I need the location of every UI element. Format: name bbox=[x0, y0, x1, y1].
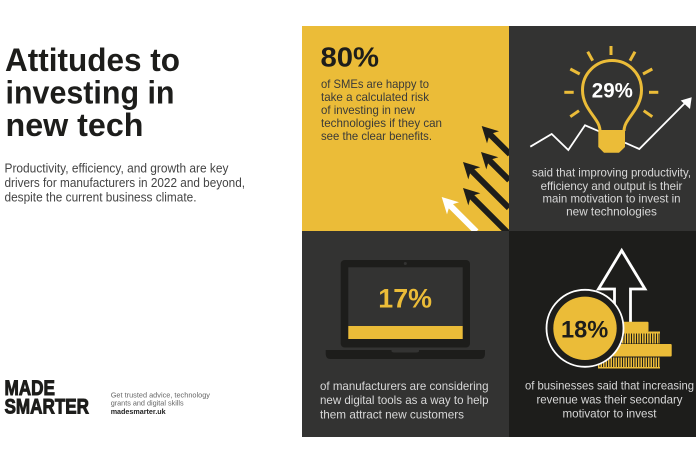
text: 17% description: them attract new customers bbox=[320, 407, 464, 421]
panel: 17% manufacturers bbox=[302, 231, 509, 437]
panel: 29% productivity bbox=[509, 26, 696, 231]
icon: laptop bbox=[326, 260, 485, 359]
text: 17% description: new digital tools as a way to help bbox=[320, 393, 489, 407]
title bbox=[5, 42, 180, 143]
text: 29% description: main motivation to invest in bbox=[542, 192, 680, 206]
text: 29% description: new technologies bbox=[566, 204, 657, 218]
stat: 18%: 18% bbox=[561, 317, 608, 344]
text: 29% description: said that improving productivity, bbox=[532, 166, 691, 180]
logo strapline: madesmarter.uk bbox=[111, 407, 166, 416]
stat: 80%: 80% bbox=[320, 42, 379, 73]
panel: 18% businesses bbox=[509, 231, 696, 437]
panel: 80% SMEs bbox=[302, 26, 516, 240]
logo strapline: Get trusted advice, technology bbox=[111, 390, 210, 399]
text: 80% description: technologies if they can bbox=[321, 116, 442, 130]
icon: up arrow bbox=[598, 250, 645, 330]
logo strapline: grants and digital skills bbox=[111, 399, 184, 408]
intro text: Productivity, efficiency, and growth are key bbox=[4, 162, 229, 176]
text: 80% description: see the clear benefits. bbox=[321, 129, 432, 143]
intro text: despite the current business climate. bbox=[4, 190, 196, 204]
text: 17% description bbox=[320, 379, 489, 421]
logo: Made Smarter: SMARTER bbox=[4, 394, 89, 418]
icon: light bulb bbox=[564, 46, 658, 153]
logo strapline bbox=[111, 390, 210, 416]
text: 29% description: efficiency and output is their bbox=[541, 179, 682, 193]
text: 18% description: revenue was their secondary bbox=[536, 392, 682, 406]
text: 80% description: take a calculated risk bbox=[321, 90, 430, 104]
text: 80% description: of SMEs are happy to bbox=[321, 77, 429, 91]
logo: Made Smarter: MADE bbox=[4, 376, 55, 400]
title: investing in bbox=[6, 74, 174, 110]
text: 80% description bbox=[321, 77, 442, 143]
icon: coin with ring bbox=[546, 290, 624, 367]
intro text bbox=[4, 162, 245, 204]
text: 80% description: of investing in new bbox=[321, 103, 415, 117]
intro text: drivers for manufacturers in 2022 and beyond, bbox=[4, 176, 245, 190]
text: 29% description bbox=[532, 166, 691, 218]
text: 17% description: of manufacturers are considering bbox=[320, 379, 488, 393]
title: Attitudes to bbox=[5, 42, 180, 78]
stat: 29%: 29% bbox=[592, 79, 633, 102]
icon: coin stack bbox=[598, 322, 672, 368]
title: new tech bbox=[6, 107, 144, 143]
chart line: rising trend bbox=[530, 97, 692, 150]
icon: rising arrows bbox=[436, 120, 516, 240]
stat: 17%: 17% bbox=[378, 283, 432, 313]
logo: Made Smarter bbox=[4, 376, 89, 418]
text: 18% description: motivator to invest bbox=[562, 407, 657, 421]
text: 18% description bbox=[525, 378, 694, 421]
